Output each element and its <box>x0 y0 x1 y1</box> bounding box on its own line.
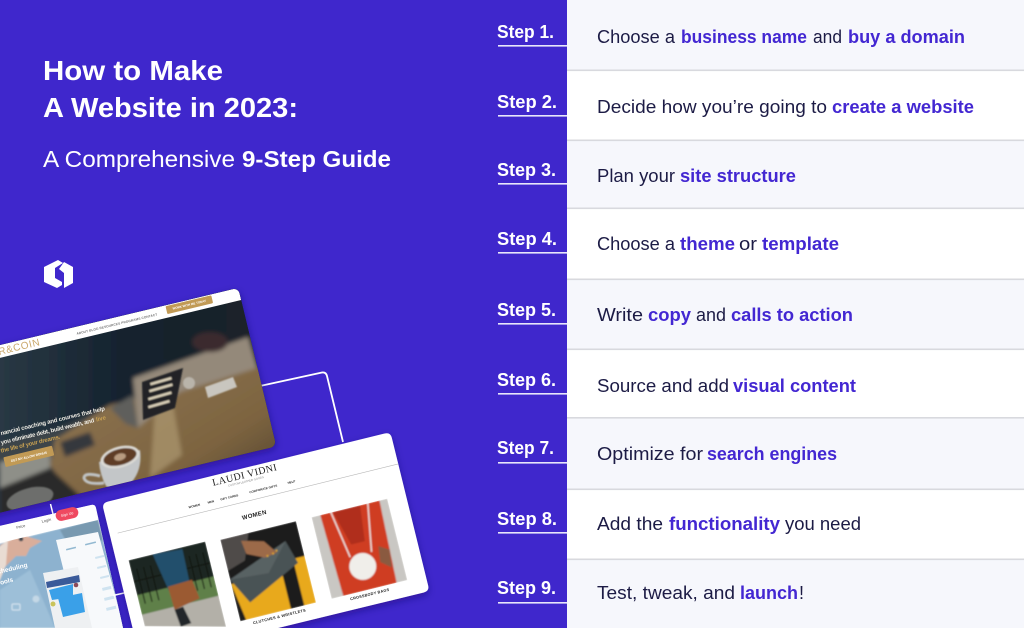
page header with brand and navigation: LAUDI VIDNI <box>211 462 278 489</box>
step 4 label <box>497 229 567 254</box>
subtitle <box>43 146 391 172</box>
step 2 text: Decide how you’re going to <box>597 97 827 117</box>
photo: tote bag <box>128 542 226 627</box>
step 6 label: Step 6. <box>497 370 556 390</box>
step 3 label <box>497 160 567 185</box>
step 1 label: Step 1. <box>497 22 554 42</box>
step 9 text: Test, tweak, and <box>597 583 735 603</box>
step 8 text: functionality <box>669 514 780 534</box>
caption: CROSSBODY BAGS <box>350 588 390 601</box>
step 4 text: template <box>762 234 839 254</box>
page header with brand and navigation: CUSTOM LEATHER GOODS <box>228 475 264 488</box>
step 5 text: Write <box>597 305 643 325</box>
header bar <box>0 289 241 358</box>
page header with brand and navigation: CORPORATE GIFTS <box>249 484 278 494</box>
calendar panel <box>56 532 124 628</box>
step 5 text: calls to action <box>731 305 853 325</box>
page header with brand and navigation <box>110 434 403 552</box>
phone mockup <box>43 567 92 628</box>
step 4 text: Choose a <box>597 234 676 254</box>
step 5 text: copy <box>648 305 691 325</box>
panel: Laudi Vidni website screenshot <box>103 433 428 628</box>
step 8 text: you need <box>785 514 861 534</box>
step 2 label <box>497 92 567 117</box>
page header with brand and navigation: GIFT CARDS <box>220 493 239 501</box>
step 3 text: Plan your <box>597 166 675 186</box>
hero text <box>0 564 28 584</box>
step 2 text <box>597 97 974 117</box>
site logo and nav <box>0 296 213 467</box>
site logo and nav: the life of your dreams. <box>0 434 61 455</box>
step 3 text <box>597 166 796 186</box>
step 6 label <box>497 370 567 395</box>
step 1 text: business name <box>681 27 807 47</box>
step 9 text: ! <box>799 583 804 603</box>
hero copy: nancial coaching and courses that help <box>0 406 106 437</box>
step 1 text <box>597 27 965 47</box>
title: How to Make <box>43 55 223 86</box>
step 1 text: buy a domain <box>848 27 965 47</box>
arrow: connector lower <box>113 593 124 596</box>
step 2 label: Step 2. <box>497 92 557 112</box>
step 8 label <box>497 509 567 534</box>
step 9 text: launch <box>740 583 798 603</box>
step 6 text <box>597 376 856 396</box>
page header with brand and navigation: WOMEN <box>242 510 267 522</box>
panel: scheduling website screenshot: Price <box>16 523 27 530</box>
step 4 label: Step 4. <box>497 229 557 249</box>
step 8 label: Step 8. <box>497 509 557 529</box>
step 1 label <box>497 22 567 47</box>
panel: scheduling website screenshot <box>0 505 125 628</box>
step 5 label <box>497 300 567 325</box>
step 1 text: Choose a <box>597 27 676 47</box>
step 7 text: search engines <box>707 444 837 464</box>
step 7 label <box>497 438 567 464</box>
step 7 label: Step 7. <box>497 438 554 458</box>
site logo and nav: you eliminate debt, build wealth, and <box>0 418 95 446</box>
site logo and nav: GET MY ALLOW BONUS <box>10 451 47 463</box>
page header with brand and navigation: MEN <box>207 499 215 505</box>
step 8 text: Add the <box>597 514 663 534</box>
panel: steps list <box>567 0 1024 628</box>
arrow: connector small <box>50 504 53 514</box>
step 9 label <box>497 578 567 604</box>
title: A Website in 2023: <box>43 92 298 123</box>
step 9 text <box>597 583 804 603</box>
step 5 text <box>597 305 853 325</box>
step 7 text: Optimize for <box>597 444 703 464</box>
step 9 label: Step 9. <box>497 578 556 598</box>
title <box>43 55 298 123</box>
icon: logo <box>44 260 73 288</box>
arrow: connector top <box>260 372 343 442</box>
page header with brand and navigation: HELP <box>287 479 296 485</box>
site logo and nav: WORK WITH ME TODAY <box>172 299 206 311</box>
header <box>0 505 98 544</box>
step 4 text <box>597 234 839 254</box>
step 5 label: Step 5. <box>497 300 556 320</box>
panel: finance website screenshot <box>0 288 278 520</box>
step 5 text: and <box>696 305 726 325</box>
subtitle: 9-Step Guide <box>242 146 391 172</box>
step 2 text: create a website <box>832 97 974 117</box>
photo: crossbody bag <box>312 499 407 599</box>
page header with brand and navigation: WOMEN <box>188 503 201 509</box>
step 1 text: and <box>813 27 842 47</box>
site logo and nav: ABOUT BLOG RESOURCES PROGRAMS CONTACT <box>76 312 158 336</box>
step 7 text <box>597 444 837 464</box>
step 3 text: site structure <box>680 166 796 186</box>
step 6 text: visual content <box>733 376 856 396</box>
caption: CLUTCHES & WRISTLETS <box>253 608 307 625</box>
sign up pill: Sign Up <box>60 511 74 518</box>
step 8 text <box>597 514 861 534</box>
photo: clutch <box>220 521 316 621</box>
subtitle: A Comprehensive <box>43 146 235 172</box>
step 4 text: theme <box>680 234 735 254</box>
step 3 label: Step 3. <box>497 160 556 180</box>
step 6 text: Source and add <box>597 376 729 396</box>
step 4 text: or <box>739 234 757 254</box>
site logo and nav: live <box>96 415 107 424</box>
panel: scheduling website screenshot: Login <box>41 517 52 524</box>
